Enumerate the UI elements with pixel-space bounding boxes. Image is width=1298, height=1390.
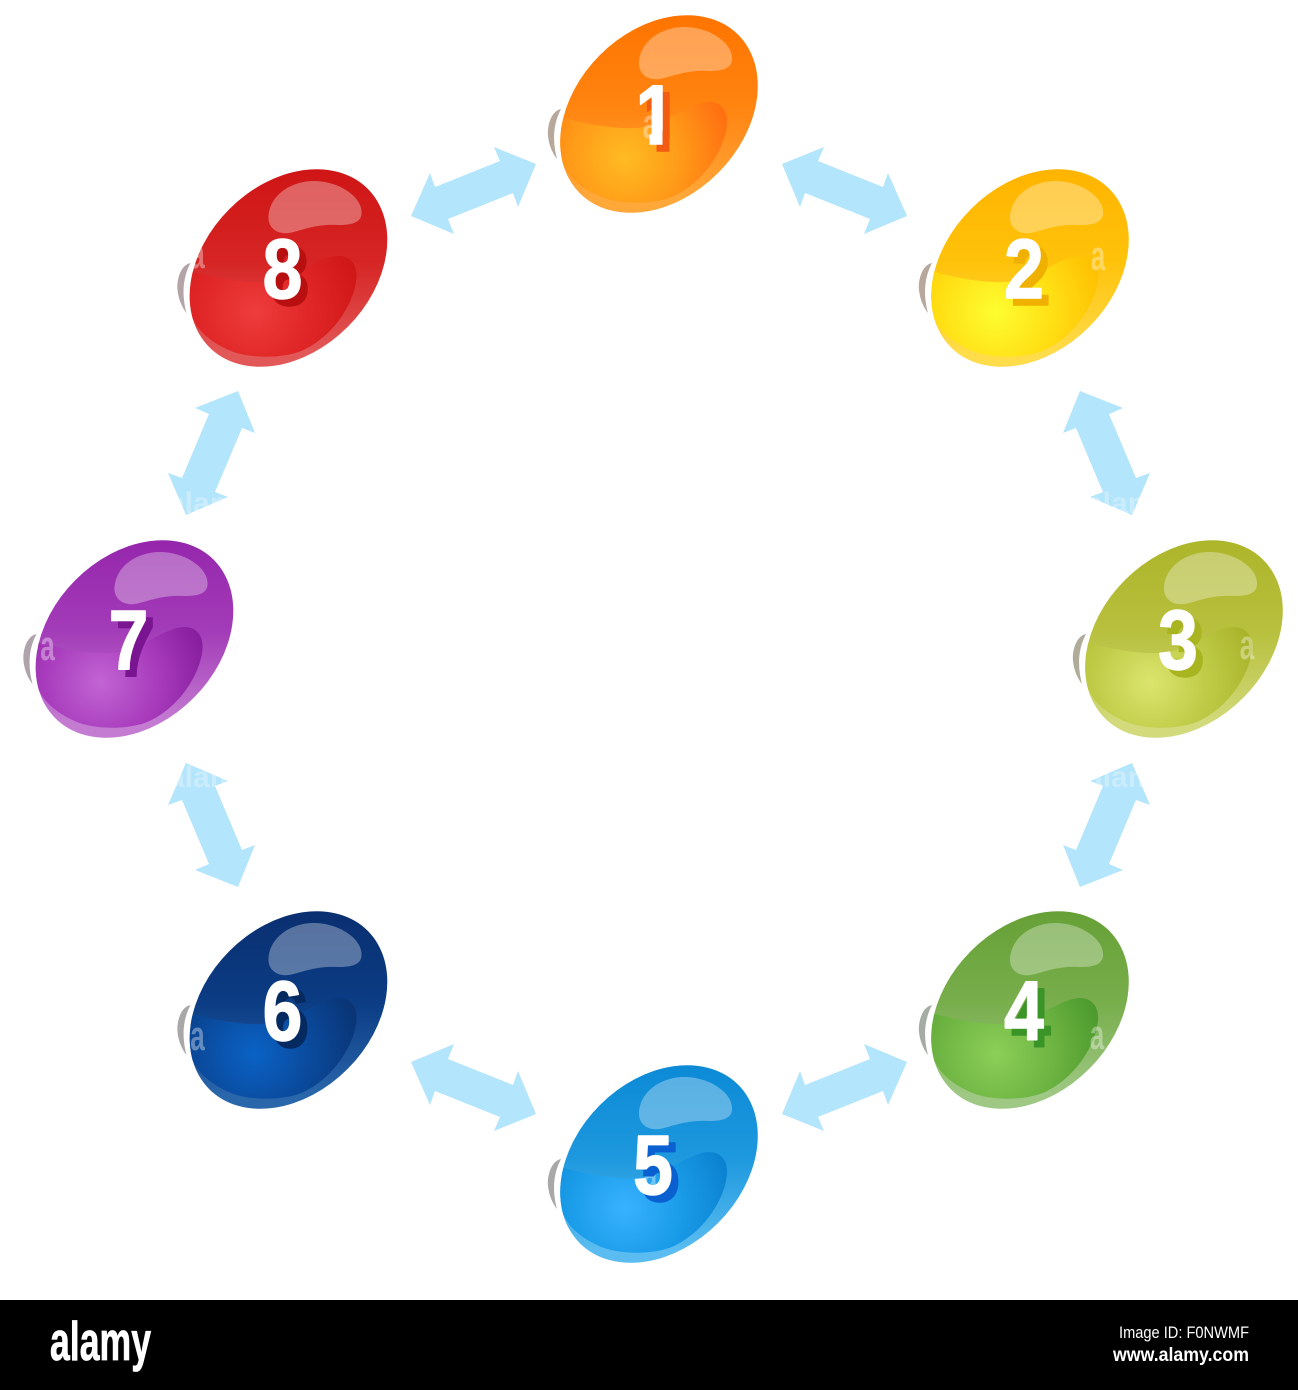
bubble 6: navy: a (190, 1013, 205, 1060)
bubble 5: blue (521, 1026, 797, 1302)
logo: alamy: alamy (50, 1310, 151, 1372)
number 5: 5 (640, 1124, 680, 1219)
footer bar (0, 1300, 1298, 1390)
number 1: 1 (643, 74, 682, 169)
bubble 4: green (892, 872, 1168, 1148)
bubble 4: green: a (1090, 1012, 1105, 1059)
number 7: 7 (109, 592, 148, 687)
arrow watermark fragments: alamy (168, 487, 253, 520)
number 8: 8 (263, 221, 302, 316)
arrow: 6 to 7 (168, 763, 255, 887)
number 3: 3 (1158, 592, 1198, 687)
bubble 2: yellow (892, 130, 1168, 406)
arrow: 7 to 8 (168, 391, 255, 515)
bubble 7: purple: a (40, 623, 55, 670)
arrow: 8 to 1 (411, 147, 536, 234)
bubble 3: olive (1046, 501, 1298, 777)
bubble 5: blue: a (643, 1151, 658, 1198)
bubble 1: orange (548, 15, 758, 213)
arrow watermark fragments (168, 487, 1171, 794)
image id: Image ID: F0NWMF (1119, 1323, 1249, 1342)
number 4: 4 (1004, 963, 1044, 1058)
bubble 1: orange: a (643, 101, 658, 148)
bubble 3: olive: a (1240, 622, 1255, 669)
number 4: 4 (1011, 970, 1051, 1065)
number 2: 2 (1011, 228, 1051, 323)
arrows: connectors between steps (168, 147, 1150, 1131)
site url: www.alamy.com (1112, 1345, 1249, 1366)
bubble 2: yellow: a (1091, 233, 1106, 280)
number 8: 8 (270, 228, 309, 323)
number 2: 2 (1004, 221, 1044, 316)
arrow watermark fragments: alamy (1086, 761, 1171, 794)
number 6: 6 (263, 963, 302, 1058)
number 1: 1 (636, 67, 675, 162)
arrow: 5 to 6 (411, 1044, 536, 1131)
number 6: 6 (270, 970, 309, 1065)
arrow: 2 to 3 (1063, 391, 1150, 515)
number 3: 3 (1165, 599, 1205, 694)
number 1 (640, 85, 670, 152)
bubble 8: red (150, 130, 427, 406)
bubble 6: navy (150, 872, 427, 1148)
bubble 8: red: a (190, 231, 205, 278)
arrow watermark fragments: alamy (168, 761, 253, 794)
arrow: 4 to 5 (782, 1044, 907, 1131)
number 5: 5 (633, 1117, 673, 1212)
bubble 7: purple (0, 501, 273, 777)
number 7: 7 (116, 599, 155, 694)
arrow: 3 to 4 (1063, 763, 1150, 887)
arrow watermark fragments: alamy (1086, 487, 1171, 520)
arrow: 1 to 2 (782, 147, 907, 234)
